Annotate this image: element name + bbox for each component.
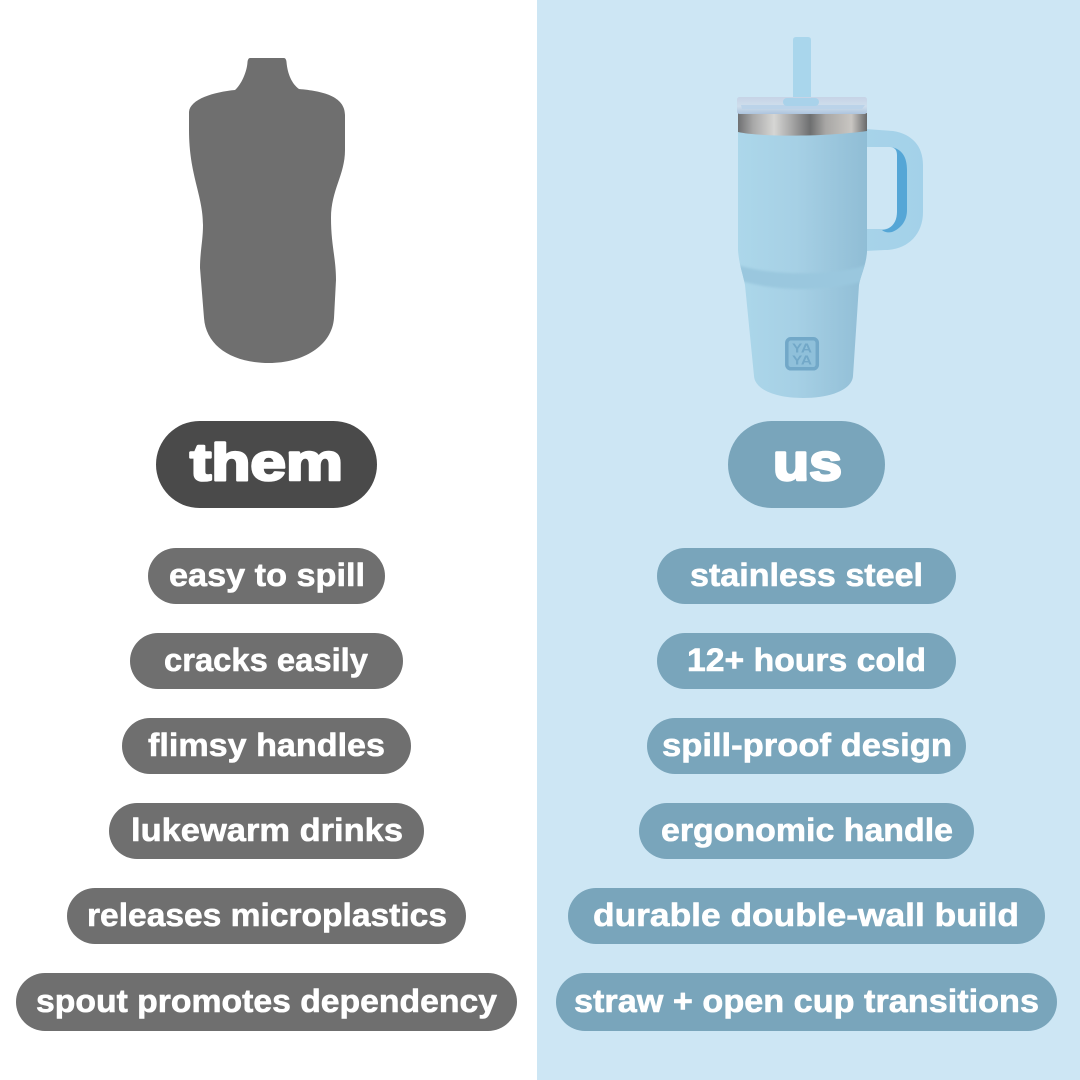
heading: them: them xyxy=(190,434,343,492)
straw xyxy=(793,37,811,98)
pill: cracks easily xyxy=(130,633,403,689)
pill: stainless steel: stainless steel xyxy=(690,557,923,593)
icon: yaya tumbler product xyxy=(730,37,923,398)
handle inner shadow xyxy=(882,147,907,232)
pill: 12+ hours cold xyxy=(657,633,956,689)
pill: ergonomic handle: ergonomic handle xyxy=(661,812,953,848)
pill: flimsy handles: flimsy handles xyxy=(148,727,385,763)
pill: straw + open cup transitions xyxy=(556,973,1057,1031)
pill: durable double-wall build xyxy=(568,888,1045,944)
pill: stainless steel xyxy=(657,548,956,604)
pill: spout promotes dependency: spout promotes dependency xyxy=(36,983,497,1019)
logo: YA xyxy=(792,352,813,368)
handle xyxy=(865,129,923,251)
cup body xyxy=(738,131,867,398)
pill: ergonomic handle xyxy=(639,803,974,859)
pill: lukewarm drinks: lukewarm drinks xyxy=(131,812,403,848)
pill: spout promotes dependency xyxy=(16,973,517,1031)
pill: easy to spill xyxy=(148,548,385,604)
pill: flimsy handles xyxy=(122,718,411,774)
list: them xyxy=(16,548,517,1031)
pill: cracks easily: cracks easily xyxy=(164,642,368,678)
pill: spill-proof design: spill-proof design xyxy=(662,727,952,763)
list: us xyxy=(556,548,1057,1031)
heading: them xyxy=(156,421,377,508)
lid xyxy=(737,97,867,114)
heading: us xyxy=(728,421,885,508)
pill: straw + open cup transitions: straw + open cup transitions xyxy=(574,983,1039,1019)
steel ring xyxy=(738,113,867,137)
logo: YA xyxy=(792,340,813,356)
cup band xyxy=(740,266,864,288)
pill: spill-proof design xyxy=(647,718,966,774)
logo xyxy=(787,339,817,369)
pill: durable double-wall build: durable double-wall build xyxy=(593,897,1019,933)
pill: 12+ hours cold: 12+ hours cold xyxy=(687,642,926,678)
panel: us background xyxy=(537,0,1080,1080)
pill: lukewarm drinks xyxy=(109,803,424,859)
pill: easy to spill: easy to spill xyxy=(169,557,365,593)
heading: us: us xyxy=(773,434,842,492)
pill: releases microplastics: releases microplastics xyxy=(87,897,447,933)
icon: generic sippy cup silhouette xyxy=(189,58,345,363)
pill: releases microplastics xyxy=(67,888,466,944)
